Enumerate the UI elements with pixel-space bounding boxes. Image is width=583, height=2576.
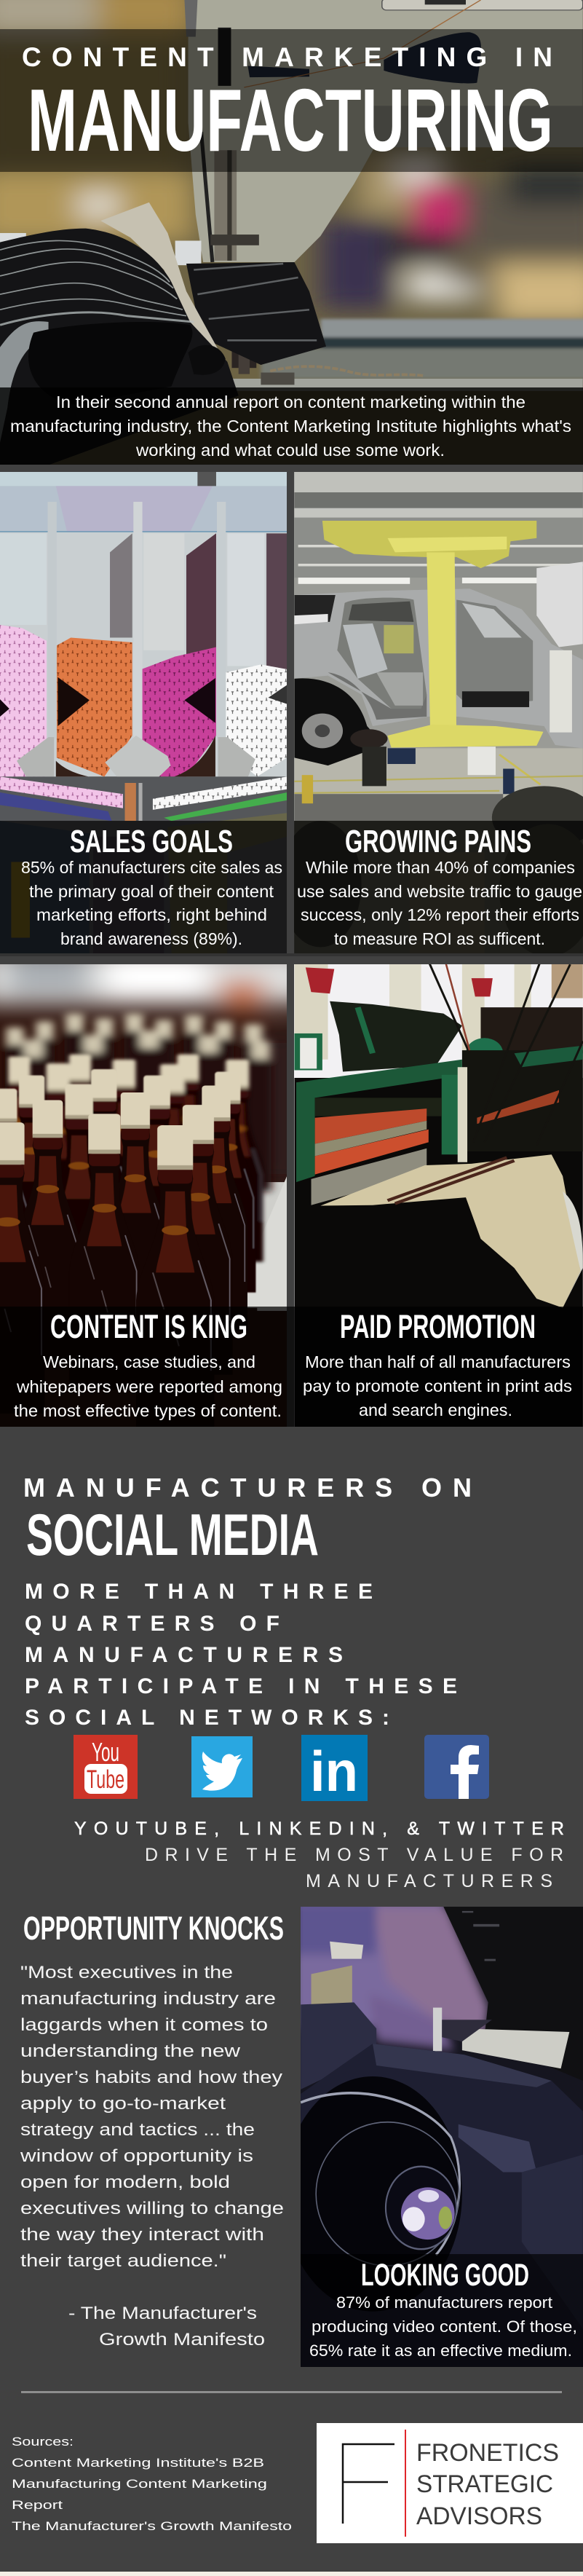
quote text: their target audience." bbox=[20, 2251, 226, 2271]
text: sales goals bbox=[21, 858, 282, 948]
quote text: manufacturing industry are bbox=[20, 1989, 276, 2009]
logo wordmark: STRATEGIC bbox=[416, 2470, 553, 2498]
title band bbox=[0, 29, 583, 172]
sources bbox=[12, 2435, 292, 2533]
text: looking good: 87% of manufacturers report bbox=[336, 2293, 552, 2312]
intro band bbox=[0, 387, 583, 465]
subheading: participation: SOCIAL NETWORKS: bbox=[25, 1706, 389, 1730]
quote text: strategy and tactics ... the bbox=[20, 2120, 255, 2140]
mount bbox=[330, 1942, 363, 1959]
panel: opportunity knocks bbox=[20, 1910, 284, 2349]
lens bbox=[283, 2076, 462, 2312]
logo: fronetics strategic advisors bbox=[317, 2423, 583, 2543]
wheel bbox=[294, 678, 384, 765]
divider bbox=[21, 2391, 562, 2393]
panel: sales goals bbox=[0, 470, 290, 957]
photo: crayon machine bbox=[0, 470, 290, 957]
text: content is king: whitepapers were reported among bbox=[16, 1377, 282, 1396]
logo mark: F bbox=[343, 2444, 394, 2524]
text: growing pains bbox=[297, 858, 582, 948]
photo: sewing machine bbox=[0, 0, 583, 469]
photo: loom bbox=[290, 961, 583, 1430]
text: sales goals: brand awareness (89%). bbox=[60, 929, 242, 948]
icon: facebook bbox=[424, 1735, 489, 1799]
intro text: In their second annual report on content marketing within the bbox=[56, 393, 526, 411]
sources: Report bbox=[12, 2498, 63, 2512]
body bbox=[301, 2044, 583, 2254]
icon: twitter bbox=[191, 1736, 253, 1797]
cords bbox=[429, 964, 583, 1123]
heading: manufacturers on: MANUFACTURERS ON bbox=[23, 1473, 472, 1502]
white table edge bbox=[0, 233, 26, 243]
quote text: apply to go-to-market bbox=[20, 2094, 226, 2114]
text: growing pains: success, only 12% report their efforts bbox=[301, 905, 579, 924]
subheading: participation: MANUFACTURERS bbox=[25, 1643, 343, 1667]
main fabric bbox=[0, 229, 239, 469]
caption band bbox=[294, 821, 583, 953]
text: youtube linkedin twitter: YOUTUBE, LINKEDIN, & TWITTER bbox=[74, 1819, 564, 1839]
quote text bbox=[20, 1963, 284, 2271]
second fabric bbox=[186, 262, 326, 365]
text: paid promotion bbox=[303, 1352, 572, 1419]
text: sales goals: marketing efforts, right behind bbox=[36, 905, 267, 924]
quote text: open for modern, bold bbox=[20, 2173, 230, 2192]
caption band bbox=[0, 1307, 294, 1427]
panel: growing pains bbox=[279, 470, 583, 957]
quote text: the way they interact with bbox=[20, 2225, 264, 2245]
logo wordmark: FRONETICS bbox=[416, 2439, 559, 2467]
machine body bbox=[189, 0, 583, 262]
far rows bbox=[5, 1014, 271, 1192]
quote attribution: Growth Manifesto bbox=[99, 2330, 265, 2349]
floor bbox=[294, 748, 583, 798]
subheading: participation bbox=[25, 1580, 457, 1730]
sources: Manufacturing Content Marketing bbox=[12, 2477, 267, 2491]
lower dark bbox=[294, 1078, 583, 1430]
text: sales goals: the primary goal of their content bbox=[29, 882, 274, 901]
text: content is king bbox=[14, 1352, 282, 1420]
subheading: participation: PARTICIPATE IN THESE bbox=[25, 1674, 457, 1698]
photo: camera bbox=[283, 1898, 583, 2372]
quote text: laggards when it comes to bbox=[20, 2015, 268, 2035]
caption band bbox=[294, 1307, 583, 1427]
quote attribution: - The Manufacturer's bbox=[68, 2304, 257, 2323]
text: looking good bbox=[309, 2293, 577, 2360]
subheading: participation: QUARTERS OF bbox=[25, 1612, 279, 1636]
cloth bbox=[320, 1154, 581, 1308]
text: content is king: Webinars, case studies, and bbox=[43, 1352, 255, 1371]
quote text: understanding the new bbox=[20, 2041, 241, 2061]
plates bbox=[17, 737, 54, 776]
text: sales goals: 85% of manufacturers cite sales as bbox=[21, 858, 282, 877]
subheading: participation: MORE THAN THREE bbox=[25, 1580, 373, 1604]
icon: youtube: You bbox=[92, 1737, 119, 1767]
beige fold bbox=[100, 202, 218, 348]
lower chutes bbox=[0, 776, 290, 821]
stitch chain bbox=[270, 366, 423, 376]
text: growing pains: While more than 40% of companies bbox=[306, 858, 575, 877]
quote text: "Most executives in the bbox=[20, 1963, 233, 1982]
text: paid promotion: pay to promote content in print ads bbox=[303, 1376, 572, 1395]
text: looking good: 65% rate it as an effective medium. bbox=[309, 2341, 572, 2360]
quote text: executives willing to change bbox=[20, 2199, 284, 2218]
green frame bbox=[296, 1060, 462, 1182]
text: growing pains: to measure ROI as sufficent. bbox=[334, 929, 545, 948]
heading: content is king: CONTENT IS KING bbox=[50, 1308, 247, 1345]
yellow carrier bbox=[322, 521, 536, 568]
bottom strip bbox=[0, 2572, 583, 2576]
text: paid promotion: More than half of all manufacturers bbox=[305, 1352, 571, 1371]
panel: looking good bbox=[283, 1898, 583, 2372]
text: drive the most value: DRIVE THE MOST VALUE FOR bbox=[145, 1845, 563, 1865]
panel: social media bbox=[23, 1473, 564, 1891]
quote text: buyer’s habits and how they bbox=[20, 2068, 282, 2087]
tires bbox=[294, 821, 583, 957]
intro text: working and what could use some work. bbox=[135, 441, 445, 460]
text: content is king: the most effective types of content. bbox=[14, 1401, 282, 1420]
intro text: manufacturing industry, the Content Marketing Institute highlights what's bbox=[10, 417, 571, 436]
operator bbox=[362, 747, 386, 786]
photo: bottles bbox=[0, 964, 287, 1427]
intro text bbox=[10, 393, 571, 460]
sources: Sources: bbox=[12, 2435, 74, 2449]
photo: car assembly line bbox=[279, 470, 583, 957]
gap strip between rows bbox=[0, 953, 583, 956]
quote text: window of opportunity is bbox=[20, 2146, 253, 2166]
panel: paid promotion bbox=[290, 961, 583, 1430]
logo wordmark: ADVISORS bbox=[416, 2502, 542, 2530]
white cord bbox=[458, 1067, 467, 1162]
caption band bbox=[0, 821, 287, 953]
car bbox=[294, 588, 583, 748]
icon: youtube bbox=[74, 1735, 138, 1799]
title: content marketing in: CONTENT MARKETING IN bbox=[22, 42, 552, 72]
heading: social media: SOCIAL MEDIA bbox=[26, 1502, 319, 1568]
icon: youtube: Tube bbox=[87, 1765, 124, 1794]
heading: sales goals: SALES GOALS bbox=[70, 824, 233, 859]
text: growing pains: use sales and website traffic to gauge bbox=[297, 882, 582, 901]
quote attribution bbox=[68, 2304, 265, 2349]
rails bbox=[48, 502, 57, 738]
icon: linkedin: in bbox=[310, 1739, 358, 1803]
crayon fills bbox=[0, 625, 47, 776]
upper machinery bbox=[330, 1001, 462, 1072]
sources: The Manufacturer's Growth Manifesto bbox=[12, 2519, 292, 2533]
panel: hero photo with title bbox=[0, 0, 583, 469]
text: looking good: producing video content. Of those, bbox=[312, 2317, 577, 2336]
heading: opportunity knocks: OPPORTUNITY KNOCKS bbox=[23, 1910, 284, 1947]
text: paid promotion: and search engines. bbox=[359, 1401, 512, 1419]
panel: content is king bbox=[0, 964, 294, 1427]
needle bbox=[231, 351, 256, 369]
logo wordmark bbox=[416, 2439, 559, 2530]
caption band bbox=[301, 2254, 583, 2367]
sources: Content Marketing Institute's B2B bbox=[12, 2456, 264, 2470]
text: manufacturers: MANUFACTURERS bbox=[306, 1871, 552, 1891]
shaded chute bands bbox=[186, 533, 216, 669]
